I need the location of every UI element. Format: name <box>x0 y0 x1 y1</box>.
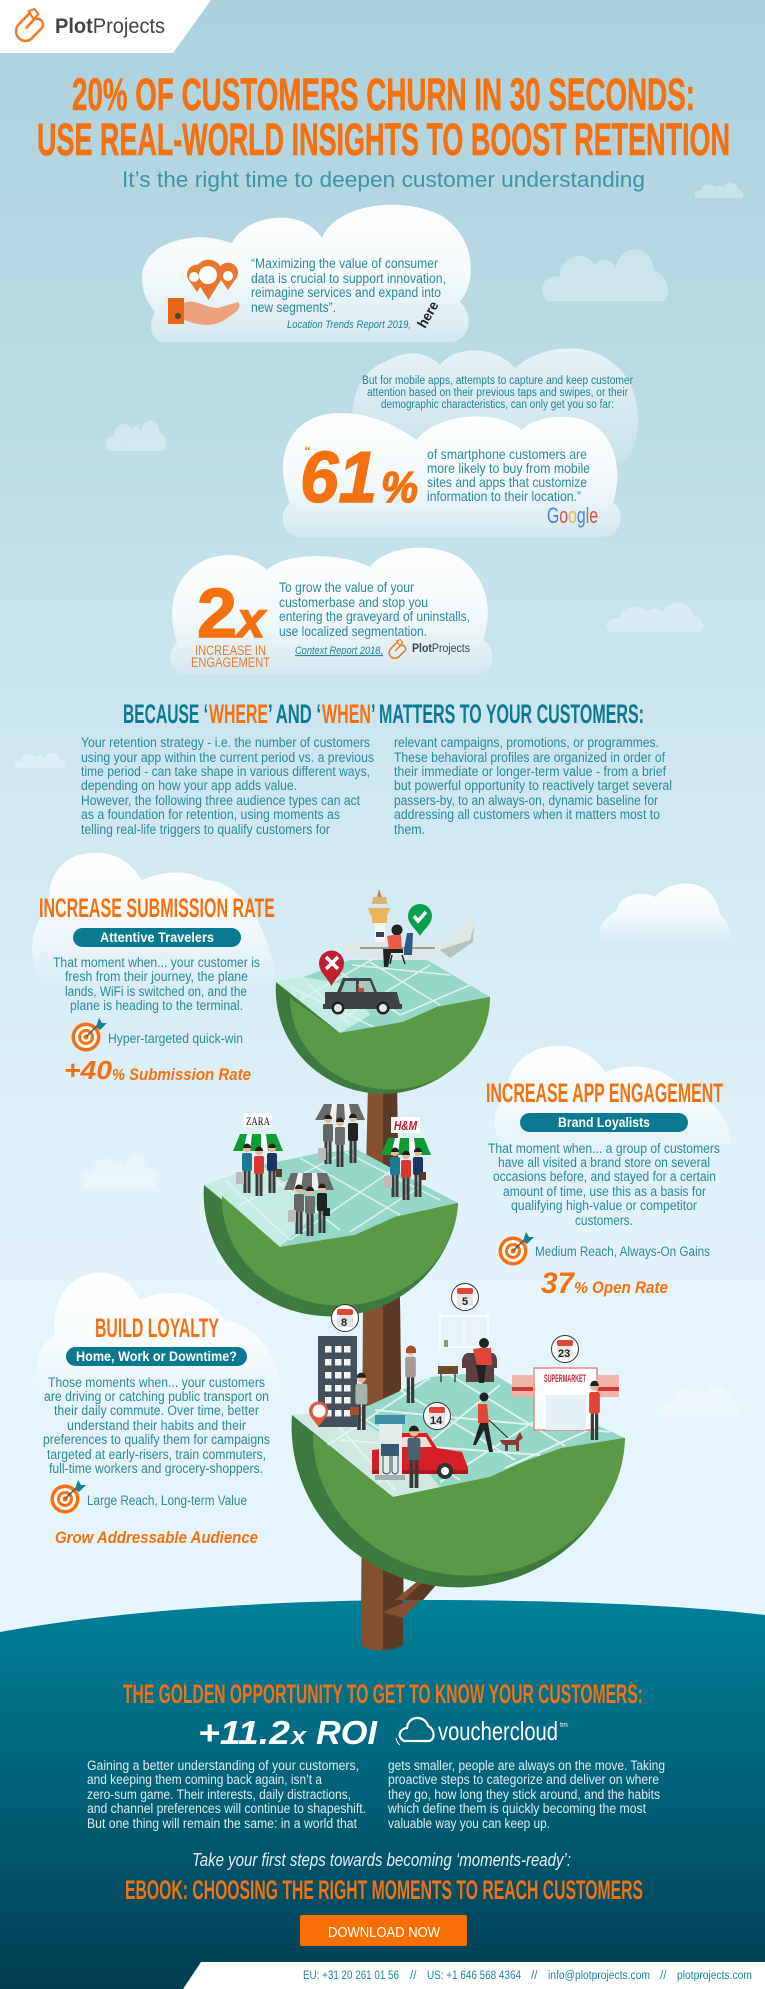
stat: 61%: % <box>381 463 418 512</box>
stat: 2x: x <box>234 592 267 648</box>
text block: retention strategy left: Your retention strategy - i.e. the number of customers <box>81 735 370 750</box>
icon: calendar 23: 23 <box>558 1348 570 1360</box>
pill label <box>73 928 241 947</box>
description: That moment when... your customer is <box>53 955 260 970</box>
button: download now: DOWNLOAD NOW <box>328 1925 440 1941</box>
decorative clouds <box>15 182 743 1416</box>
description <box>53 955 260 1013</box>
segmentation text: customerbase and stop you <box>279 594 428 610</box>
text block: retention strategy right: them. <box>394 822 425 837</box>
quote text <box>251 256 446 315</box>
intro text <box>362 375 633 411</box>
source: Context Report 2018, <box>295 645 383 657</box>
icon: office building <box>318 1336 357 1427</box>
description: amount of time, use this as a basis for <box>503 1184 706 1199</box>
text block: golden right <box>387 1758 665 1831</box>
quote text: new segments”. <box>251 300 336 315</box>
shop: Zara: ZARA <box>246 1114 270 1128</box>
description: are driving or catching public transport on <box>44 1389 269 1404</box>
panel: quote cloud <box>142 205 471 342</box>
text block: golden left: Gaining a better understanding of your customers, <box>87 1758 359 1773</box>
description <box>488 1141 720 1228</box>
text block: retention strategy right: These behavioral profiles are organized in order of <box>394 750 665 765</box>
panel: brand loyalists illustration <box>204 1104 458 1316</box>
stat <box>541 1267 668 1300</box>
call to action line: Take your first steps towards becoming ‘moments-ready’: <box>192 1850 571 1870</box>
stat: ROI <box>198 1714 378 1751</box>
people and objects <box>350 1316 619 1488</box>
description: fresh from their journey, the plane <box>65 969 248 984</box>
stat caption: ENGAGEMENT <box>191 655 270 670</box>
google logo: Google <box>547 503 598 528</box>
segmentation text: entering the graveyard of uninstalls, <box>279 608 470 624</box>
reach label: Hyper-targeted quick-win <box>108 1031 243 1046</box>
footer contact bar: // <box>410 1970 417 1982</box>
description: preferences to qualify them for campaigns <box>43 1432 270 1447</box>
description: Those moments when... your customers <box>48 1375 265 1390</box>
text block: retention strategy left: time period - can take shape in various different ways, <box>81 764 370 779</box>
icon: calendar 8 <box>332 1304 358 1332</box>
stat text <box>427 446 590 504</box>
people and objects: SUPERMARKET <box>544 1373 586 1385</box>
stat text: sites and apps that customize <box>427 474 587 490</box>
text block: golden right: they go, how long they stick around, and the habits <box>388 1787 660 1802</box>
reach label: Large Reach, Long-term Value <box>87 1493 247 1508</box>
heading: where and when: BECAUSE ‘ <box>123 699 208 729</box>
segmentation text <box>279 579 470 639</box>
stat: ROI: +11.2 <box>198 1714 291 1751</box>
text block: golden left <box>87 1758 366 1831</box>
shop: grey top <box>315 1104 365 1167</box>
subtitle: It’s the right time to deepen customer understanding <box>122 167 645 192</box>
stat: Submission Rate <box>129 1066 251 1084</box>
quote text: “Maximizing the value of consumer <box>251 256 438 271</box>
footer contact bar: EU: +31 20 261 01 56 <box>303 1970 399 1982</box>
panel: increase submission rate <box>39 893 275 1085</box>
stat: ROI: x <box>289 1723 308 1750</box>
stat caption: INCREASE IN <box>195 643 266 658</box>
description: customers. <box>575 1213 633 1228</box>
description: qualifying high-value or competitor <box>511 1198 697 1213</box>
description: understand their habits and their <box>67 1418 246 1433</box>
stat: 2x <box>197 574 267 652</box>
here logo: here <box>414 298 442 330</box>
intro text: attention based on their previous taps and swipes, or their <box>367 387 628 399</box>
crown 2 <box>204 1150 458 1316</box>
shop: H&M: H&M <box>394 1118 418 1133</box>
text block: retention strategy left: However, the following three audience types can act <box>81 793 360 808</box>
heading: where and when <box>123 699 644 729</box>
title <box>37 69 730 165</box>
crown 3 <box>292 1372 625 1587</box>
logo panel <box>0 0 211 53</box>
stat: 61%: 61 <box>300 438 377 518</box>
quote text: data is crucial to support innovation, <box>251 271 446 286</box>
panel: home work downtime illustration <box>292 1284 625 1587</box>
footer contact bar: plotprojects.com <box>677 1970 752 1982</box>
stat <box>64 1055 251 1085</box>
icon: location pins on hand <box>168 260 240 325</box>
pill label: Brand Loyalists <box>558 1115 650 1130</box>
panel: 2x engagement cloud <box>170 548 492 675</box>
footer contact bar <box>183 1962 765 1989</box>
icon: green check pin <box>408 904 432 936</box>
text block: retention strategy right: addressing all customers when it matters most to <box>394 807 660 822</box>
icon: airport tower <box>368 889 390 943</box>
footer contact bar: // <box>660 1970 667 1982</box>
quote source: Location Trends Report 2019, <box>287 319 411 331</box>
crown 1 <box>276 955 490 1094</box>
footer contact bar: info@plotprojects.com <box>548 1970 650 1982</box>
text block: retention strategy right: but powerful opportunity to reactively target several <box>394 778 672 793</box>
text block: retention strategy left: telling real-life triggers to qualify customers for <box>81 822 330 837</box>
icon: calendar 14 <box>424 1402 450 1430</box>
icon: calendar 5 <box>452 1284 478 1310</box>
stat text: more likely to buy from mobile <box>427 460 590 476</box>
trunk <box>361 1085 442 1640</box>
section clouds <box>32 853 730 1400</box>
description: have all visited a brand store on several <box>498 1155 710 1170</box>
stat: +40 <box>64 1055 113 1085</box>
segmentation text: To grow the value of your <box>279 579 414 595</box>
icon: target <box>50 1480 86 1514</box>
description <box>43 1375 270 1476</box>
vouchercloud logo: vouchercloud <box>438 1716 558 1746</box>
shop: H&M <box>381 1117 431 1200</box>
stat: 2x: 2 <box>197 574 237 652</box>
icon: airplane <box>340 916 474 958</box>
footer contact bar: // <box>531 1970 538 1982</box>
heading: where and when: WHEN <box>322 699 371 729</box>
text block: retention strategy left: depending on how your app adds value. <box>81 778 297 793</box>
icon: calendar 5: 5 <box>462 1296 468 1308</box>
PlotProjects small logo <box>389 640 470 658</box>
icon: car <box>323 978 402 1014</box>
panel: mobile apps cloud <box>353 348 638 462</box>
button: download now <box>300 1915 467 1946</box>
icon: calendar 23 <box>552 1336 578 1362</box>
text block: golden left: and channel preferences will continue to shapeshift. <box>87 1801 366 1816</box>
panel: build loyalty <box>43 1313 270 1547</box>
logo panel: PlotProjects <box>55 15 165 38</box>
stat text: of smartphone customers are <box>427 446 587 462</box>
footer contact bar: US: +1 646 568 4364 <box>427 1970 522 1982</box>
stat: Open Rate <box>592 1279 668 1297</box>
text block: golden right: valuable way you can keep up. <box>388 1816 550 1831</box>
stat: 37 <box>541 1267 575 1300</box>
stat: ROI: ROI <box>316 1714 378 1751</box>
text block: retention strategy right: their immediate or longer-term value - from a brief <box>394 764 666 779</box>
text block: golden right: which define them is quickly becoming the most <box>387 1801 646 1816</box>
description: full-time workers and grocery-shoppers. <box>49 1461 263 1476</box>
panel: 61 percent cloud <box>283 413 621 537</box>
icon: target <box>72 1018 107 1052</box>
text block: golden right: gets smaller, people are always on the move. Taking <box>388 1758 665 1773</box>
icon: red cross pin <box>319 950 344 986</box>
text block: retention strategy right <box>394 735 672 837</box>
icon: map pin <box>309 1402 328 1427</box>
stat: 61% <box>300 438 418 518</box>
lower trunk over footer <box>361 1600 420 1650</box>
vouchercloud logo <box>396 1716 568 1746</box>
shop: grey front <box>284 1173 334 1236</box>
heading: where and when: WHERE <box>209 699 268 729</box>
icon: target <box>498 1232 534 1266</box>
description: occasions before, and stayed for a certain <box>493 1169 716 1184</box>
intro text: demographic characteristics, can only get you so far: <box>381 399 614 411</box>
description: lands, WiFi is switched on, and the <box>65 984 247 999</box>
icon: calendar 14: 14 <box>430 1415 443 1427</box>
stat: 61%: “ <box>304 444 310 458</box>
pill label <box>520 1113 688 1132</box>
heading: BUILD LOYALTY <box>95 1313 219 1343</box>
text block: retention strategy left: using your app within the current period vs. a previous <box>81 750 374 765</box>
heading: INCREASE SUBMISSION RATE <box>39 893 275 923</box>
person on chair <box>383 924 413 967</box>
pill label: Attentive Travelers <box>100 930 214 945</box>
heading: where and when: ’ AND ‘ <box>268 699 321 729</box>
panel: increase app engagement <box>486 1078 723 1300</box>
description: their daily commute. Over time, better <box>54 1403 259 1418</box>
text block: golden left: zero-sum game. Their interests, daily distractions, <box>87 1787 351 1802</box>
stat: Grow Addressable Audience <box>55 1528 258 1547</box>
text block: retention strategy left: as a foundation for retention, using moments as <box>81 807 340 822</box>
PlotProjects small logo: PlotProjects <box>412 643 470 655</box>
text block: retention strategy left <box>81 735 374 837</box>
icon: calendar 8: 8 <box>341 1317 347 1329</box>
stat text: information to their location.” <box>427 488 581 504</box>
description: plane is heading to the terminal. <box>70 998 243 1013</box>
stat: % <box>574 1280 588 1297</box>
text block: golden left: But one thing will remain the same: in a world that <box>87 1816 357 1831</box>
quote text: reimagine services and expand into <box>251 285 441 300</box>
text block: retention strategy right: passers-by, to an always-on, dynamic baseline for <box>394 793 658 808</box>
panel: attentive travelers illustration <box>276 889 490 1094</box>
pill label: Home, Work or Downtime? <box>76 1349 237 1364</box>
vouchercloud logo: tm <box>560 1722 568 1729</box>
shop: Zara <box>233 1113 283 1196</box>
stat: % <box>112 1067 125 1084</box>
description: targeted at early-risers, train commuters, <box>47 1447 266 1462</box>
text block: golden right: proactive steps to categorize and deliver on where <box>388 1772 659 1787</box>
segmentation text: use localized segmentation. <box>279 623 427 639</box>
text block: retention strategy right: relevant campaigns, promotions, or programmes. <box>394 735 659 750</box>
description: That moment when... a group of customers <box>488 1141 720 1156</box>
intro text: But for mobile apps, attempts to capture and keep customer <box>362 375 633 387</box>
panel: teal footer background <box>0 1600 765 1989</box>
reach label: Medium Reach, Always-On Gains <box>535 1244 710 1259</box>
text block: golden left: and keeping them coming back again, isn’t a <box>87 1772 322 1787</box>
stat caption <box>191 643 270 670</box>
